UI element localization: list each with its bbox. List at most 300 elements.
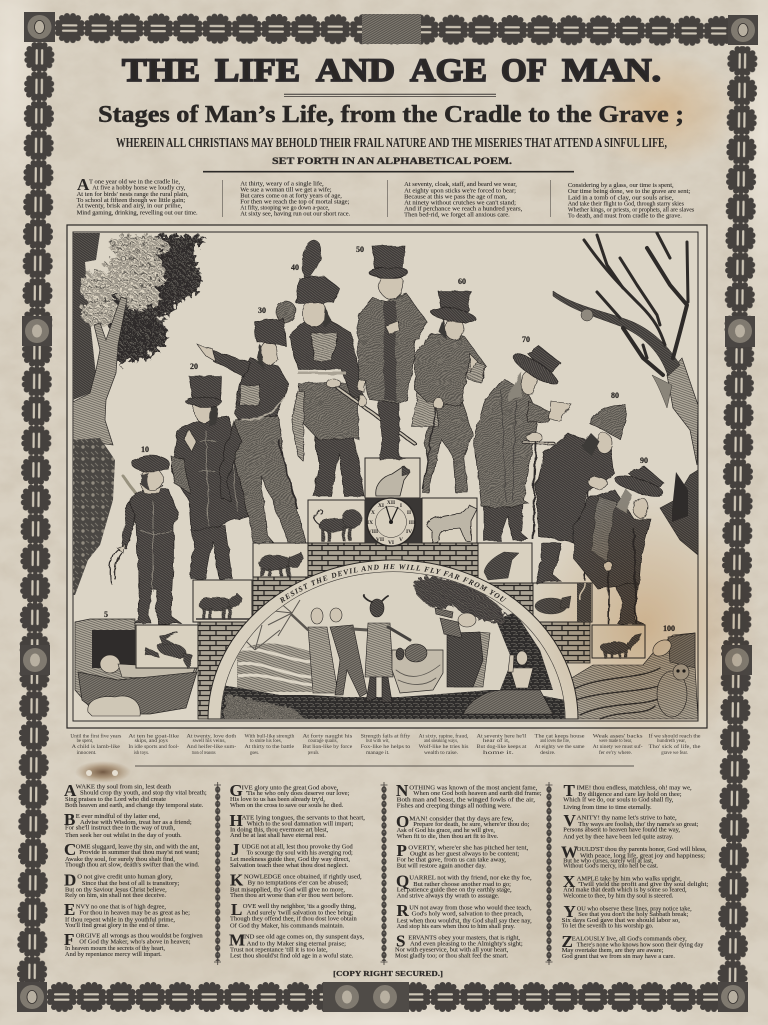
caption age 80: At eighty we the same — [535, 744, 585, 750]
clock: X — [371, 510, 375, 516]
poem column 2: At fifty, stooping we go down a-pace, — [240, 205, 330, 212]
dog box — [478, 543, 532, 583]
caption age 30: to smite his foes, — [250, 737, 282, 744]
caption age 10 — [128, 734, 180, 756]
title: OF — [501, 53, 547, 89]
stage 90: very old man — [573, 465, 665, 623]
engraving panel — [66, 224, 708, 729]
poem column T to Z: EALOUSLY live, all God's commands obey, — [572, 935, 687, 942]
poem column T to Z: OU who observe these lines, pray notice take, — [577, 905, 692, 912]
poem column T to Z: Persons absent to heaven have found the way, — [563, 827, 680, 834]
poem column T to Z: X — [563, 872, 576, 891]
poem column 2: We sue a woman till we get a wife; — [240, 186, 332, 193]
poem column N to S: And strive always thy wrath to assuage. — [397, 893, 500, 900]
caption age 60 — [419, 732, 468, 756]
poem column G to M: Salvation teach thee what thou dost neglect. — [230, 862, 349, 869]
dog box on top of the clock — [365, 458, 420, 498]
poem column N to S: And even pleasing to the Almighty's sight; — [410, 941, 523, 948]
poem column 4: Considering by a glass, our time is spent, — [568, 183, 674, 189]
donkey box — [592, 625, 645, 658]
poem column N to S: When fit to die, then thou art fit to live. — [397, 833, 499, 840]
poem column A to F: O not give credit unto human glory, — [77, 873, 173, 880]
poem column G to M: His love to us has been already try'd, — [230, 796, 325, 803]
caption age 5: Until the first five years — [70, 732, 121, 740]
poem column G to M: K — [230, 870, 244, 890]
poem column T to Z: There's none who knows how soon their dying day — [577, 941, 704, 948]
baby blanket — [118, 664, 195, 679]
poem column N to S: Fishes and creeping things all nothing were. — [397, 802, 512, 809]
poem column G to M: IVE glory unto the great God above, — [242, 784, 339, 791]
poem column N to S: When one God both heaven and earth did frame; — [413, 790, 542, 797]
poem column N to S: OVERTY, where'er she has pitched her tent, — [408, 845, 529, 852]
poem column T to Z: AMPLE take by him who walks upright, — [577, 875, 682, 882]
caption age 40: At forty naught his — [302, 732, 352, 740]
table cloth with treasure — [392, 644, 443, 693]
caption age 100: hundreth year, — [657, 738, 686, 744]
opening poem in four columns — [77, 175, 695, 220]
caption age 90: fer ev'ry where. — [599, 749, 632, 756]
stage 100: shrouded corpse and owl — [565, 633, 698, 719]
poem column G to M: To scourge thy soul with his avenging rod; — [247, 849, 353, 856]
poem column N to S: OTHING was known of the most ancient fame, — [409, 784, 538, 791]
poem column A to F: If thou repent while in thy youthful prime, — [65, 916, 175, 923]
caption age 50 — [361, 732, 411, 756]
poem column T to Z: OULD'ST thou thy parents honor, God will bless, — [577, 846, 707, 853]
bead column dividers — [214, 782, 552, 965]
poem column A to F: Since that the best of all is transitory; — [82, 880, 180, 887]
poem column A to F: For she'll instruct thee in the way of truth, — [65, 825, 175, 832]
poem column 1: At five a hobby horse we loudly cry, — [92, 184, 186, 191]
poem column G to M: But misapplied, thy God will give no more, — [230, 886, 345, 893]
caption age 40: courage quails, — [308, 738, 338, 744]
poem column T to Z — [561, 781, 708, 960]
caption age 100: grave we fear. — [661, 749, 688, 756]
poem column G to M: ATE lying tongues, the servants to that heart, — [242, 814, 365, 821]
poem column T to Z: See that you don't the holy Sabbath break; — [578, 911, 688, 918]
poem column G to M: UDGE not at all, lest thou provoke thy God — [242, 844, 353, 851]
poem column N to S: Lest when thou would'st, thy God shall say thee nay, — [397, 917, 532, 924]
goat box — [193, 580, 252, 622]
poem column T to Z: Welcome to thee, by him thy soul is steered. — [563, 892, 674, 899]
caption age 30: With bull-like strength — [244, 734, 295, 740]
poem column T to Z: And yet by thee have been led quite astray. — [563, 834, 674, 841]
poem column 2: But cares come on at forty years of age, — [240, 192, 342, 199]
background shade behind the tree — [73, 233, 100, 400]
poem column A to F: Awake thy soul, for surely thou shalt find, — [65, 856, 175, 863]
caption age 10: skips, and joys — [135, 738, 168, 744]
ox box — [253, 543, 308, 577]
temptress figure — [463, 651, 553, 714]
poem column 3: At eighty upon sticks we're forced to bear; — [404, 187, 516, 194]
devil figure — [364, 595, 410, 702]
poem column T to Z: IME! thou endless, matchless, oh! may we, — [577, 784, 692, 791]
clock — [365, 498, 422, 546]
poem column A to F: Should crop thy youth, and stop thy vital breath; — [80, 789, 207, 796]
poem column N to S: Q — [396, 872, 409, 890]
poem column N to S: N — [396, 781, 409, 800]
clock: V — [399, 537, 403, 543]
stage 50: mature man — [357, 245, 427, 458]
poem column G to M: Trust not repentance 'till it is too late, — [230, 946, 328, 953]
seated drunkard — [435, 608, 490, 687]
poem column N to S: For he that gave, from us can take away, — [397, 856, 506, 863]
woman figure — [292, 608, 338, 693]
poem column T to Z: By diligence and care lay hold on thee; — [578, 791, 682, 798]
left leafy tree — [73, 232, 203, 595]
border: centre block bottom — [323, 982, 409, 1012]
dark foliage behind temptress — [496, 612, 553, 690]
age numbers: 100 — [663, 624, 675, 633]
poem column N to S: S — [396, 932, 405, 950]
age numbers: 70 — [522, 335, 530, 344]
poem column A to F: And by repentance mercy will impart. — [65, 951, 162, 958]
caption age 30: At thirty to the battle — [244, 744, 295, 750]
poem column N to S: O — [396, 812, 409, 831]
poem column A to F: A — [64, 781, 77, 800]
caption age 5: A child is lamb-like — [72, 744, 121, 750]
poem column G to M: Then thou art worse than e'er thou wert before. — [230, 892, 354, 899]
caption age 20: swell his veins, — [193, 738, 226, 744]
stage 80: aged man — [535, 404, 625, 582]
caption age 80: desire. — [540, 750, 556, 756]
poem column T to Z: Y — [564, 902, 576, 921]
poem column N to S: R — [396, 901, 410, 920]
poem column A to F: Provide in summer that thou may'st not want; — [79, 849, 199, 856]
age numbers: 10 — [141, 445, 149, 454]
poem column G to M: NOWLEDGE once obtained, if rightly used, — [244, 874, 362, 881]
border: corner medallion top right — [728, 15, 758, 45]
poem column N to S: P — [396, 841, 407, 860]
poem column T to Z: God grant that we from sin may have a care. — [562, 953, 675, 960]
caption age 70 — [477, 734, 527, 756]
caption age 100: If we should reach the — [649, 732, 701, 740]
poem column G to M: And be at last shall have eternal rest. — [230, 832, 326, 839]
stage 70: old man — [473, 345, 570, 540]
caption age 20: mon of reasons — [192, 749, 216, 756]
captions under the engraving — [70, 732, 701, 756]
poem column T to Z: ANITY! thy name let's strive to hate, — [577, 814, 677, 821]
caption age 50: but with wit, — [366, 738, 390, 744]
caption age 70: home it. — [483, 750, 514, 756]
caption age 50: Fox-like he helps to — [361, 744, 411, 750]
clock: IX — [367, 520, 373, 526]
poem column G to M: IND see old age comes on, thy sunspent days, — [243, 934, 364, 941]
caption age 20 — [186, 734, 237, 756]
tree canopy — [410, 574, 503, 622]
border: bottom strip — [47, 982, 719, 1012]
scene inside arch — [221, 570, 565, 720]
poem column G to M: L — [231, 900, 242, 919]
poem column N to S: Prepare for death, be sure, where'er thou do; — [413, 821, 529, 828]
poem column 4: Laid in a tomb of clay, our souls arise, — [568, 194, 674, 201]
branches — [584, 233, 688, 375]
grass foreground left — [223, 694, 305, 719]
stage 60: older man — [410, 290, 485, 492]
poem column A to F: NVY no one that is of high degree, — [76, 904, 166, 911]
subtitle: Stages of Man’s Life, from the Cradle to the Grave ; — [98, 102, 684, 128]
poem column N to S: And stop his ears when thou to him shall pray. — [397, 923, 515, 930]
title: AGE — [410, 53, 487, 89]
owl — [657, 664, 689, 717]
caption age 70: But dog-like keeps at — [477, 744, 527, 750]
age numbers: 50 — [356, 245, 364, 254]
poem column 1 — [77, 175, 198, 216]
age numbers: 80 — [611, 391, 619, 400]
trunk — [667, 358, 698, 465]
poem column N to S: God's holy word, salvation to thee preach, — [412, 910, 524, 917]
poem column T to Z: V — [564, 811, 576, 830]
poem column T to Z: Without God's mercy, into hell be cast. — [563, 863, 659, 870]
poem column N to S: Let patience guide thee on thy earthly stage, — [397, 887, 512, 894]
clock: VI — [388, 540, 394, 546]
caption age 5: be spent, — [77, 738, 93, 744]
stage 20: young man — [170, 375, 247, 578]
poem column G to M: H — [230, 811, 243, 830]
poem column A to F: B — [64, 810, 75, 829]
caption age 70: hear of it, — [483, 737, 510, 744]
poem column G to M: J — [231, 840, 240, 859]
stage 40: officer — [288, 239, 413, 495]
age numbers: 90 — [640, 456, 648, 465]
poem column A to F: In heaven mourn the secrets of thy heart, — [65, 945, 165, 952]
poem column G to M: In doing this, thou evermore art blest, — [230, 826, 329, 833]
poem column 4: Whether kings, or priests, or prophets, all are slaves — [568, 208, 695, 214]
caption age 10: At ten he goat-like — [128, 734, 180, 740]
poem column N to S: Ought as her guest always to be content; — [410, 851, 519, 858]
caption age 50: manage it. — [366, 750, 390, 756]
ivy on trunk — [73, 438, 115, 595]
poem column G to M: 'Tis he who only does deserve our love; — [246, 790, 350, 797]
poem column T to Z: 'Twill yield the profit and give thy soul delight; — [578, 881, 708, 888]
poem column 2: At thirty, weary of a single life, — [240, 180, 324, 187]
arch band — [208, 560, 578, 719]
border: side medallion right lower — [722, 645, 752, 675]
caption age 90 — [593, 734, 643, 756]
poem column A to F: OME sluggard, leave thy sin, and with the ant, — [76, 843, 200, 850]
poem column N to S: Most gladly too; or thou shalt feel the smart. — [395, 953, 509, 960]
poem column G to M: And surely 'twill salvation to thee bring; — [247, 909, 354, 916]
age numbers — [104, 245, 675, 633]
poem column 2: At sixty see, having run out our short race. — [240, 212, 351, 218]
clock: I — [400, 503, 402, 509]
poem column A to F: Sing praises to the Lord who did create — [65, 796, 166, 803]
age numbers: 60 — [458, 277, 466, 286]
poem column 1: At ten for birds' nests range the rural plain, — [77, 191, 189, 198]
caption age 30: goes. — [250, 750, 259, 756]
poem column A to F: Both heaven and earth, and change thy temporal state. — [65, 802, 204, 809]
rule under title — [284, 94, 496, 96]
poem column A to F: But on thy Saviour Jesus Christ believe, — [65, 886, 167, 893]
poem column A to F: Advise with Wisdom, treat her as a friend; — [80, 819, 192, 826]
poem column N to S: But will restore again another day. — [397, 862, 486, 869]
poem column 3: Because at this we pass the age of man, — [404, 193, 507, 200]
arch with allegorical scene — [208, 560, 578, 720]
tree trunk — [73, 297, 127, 445]
clock: XI — [378, 503, 384, 509]
cat box and fire — [533, 583, 592, 622]
alphabetical poem — [64, 781, 708, 960]
caption age 10: In idle sports and fool- — [128, 743, 179, 750]
poem column G to M: M — [229, 930, 245, 950]
stains and ageing marks — [75, 495, 760, 783]
border: centre block top — [362, 14, 421, 44]
copyright line: [COPY RIGHT SECURED.] — [333, 969, 443, 978]
caption age 60: and sneaking ways, — [424, 738, 458, 744]
poem column 4: Our time being done, we to the grave are sent; — [568, 189, 691, 195]
border: corner medallion bottom left — [17, 982, 47, 1012]
age numbers: 5 — [104, 610, 108, 619]
dead tree on the right — [553, 233, 698, 555]
arch motto: RESIST THE DEVIL AND HE WILL FLY FAR FROM YOU — [280, 564, 506, 604]
young man figure — [330, 608, 368, 697]
poem column 1: At twenty, brisk and airy, in our prime, — [77, 204, 183, 210]
poem column N to S: MAN! consider that thy days are few, — [409, 815, 514, 822]
clock: III — [409, 520, 415, 526]
poem column T to Z: To let the seventh to his worship go. — [562, 923, 654, 930]
caption age 100: Tho' sick of life, the — [649, 743, 701, 750]
poem column T to Z: Living from time to time eternally. — [563, 804, 652, 811]
age numbers: 40 — [291, 263, 299, 272]
poem column A to F: For thou in heaven may be as great as he; — [79, 909, 190, 916]
clock: IV — [406, 529, 412, 535]
poem column T to Z: Which if we do, our souls to God shall fly, — [563, 797, 674, 804]
poem column T to Z: With peace, long life, great joy and happiness; — [580, 852, 705, 859]
poem column G to M: OVE well thy neighbor, 'tis a goodly thing, — [243, 903, 356, 910]
rule under headings — [203, 171, 574, 173]
poem column A to F: You'll find great glory in the end of time. — [65, 922, 170, 929]
age numbers: 30 — [258, 306, 266, 315]
poem column A to F: Then seek her out whilst in the day of youth. — [65, 832, 182, 839]
poem column G to M: And to thy Maker sing eternal praise; — [247, 940, 346, 947]
basket — [78, 672, 197, 714]
stage 30: soldier — [197, 300, 305, 542]
poem column 3: At seventy, cloak, staff, and beard we wear, — [404, 181, 517, 188]
caption age 90: were made to bear, — [599, 738, 632, 744]
border: top strip — [55, 13, 730, 46]
poem column G to M: Let meekness guide thee, God thy way direct, — [230, 856, 350, 863]
poem column T to Z: T — [564, 781, 576, 800]
poem column N to S — [395, 781, 542, 960]
lamb box — [422, 498, 477, 543]
poem column T to Z: Six days God gave that we should labor so, — [562, 917, 680, 924]
poem column G to M: G — [230, 781, 243, 800]
hare box — [136, 625, 198, 668]
title: AND — [316, 53, 395, 89]
border: corner medallion bottom right — [718, 982, 748, 1012]
caption age 100 — [649, 732, 701, 756]
border: side medallion left upper — [22, 316, 52, 346]
poem column A to F: Rely on him, sin shall not thee deceive. — [65, 892, 166, 899]
poem column A to F: ORGIVE all wrongs as thou wouldst be forgiven — [76, 933, 203, 940]
ground foliage — [221, 685, 565, 719]
poem column A to F: E — [64, 900, 75, 919]
poem column T to Z: W — [561, 842, 578, 862]
clock: VIII — [368, 529, 378, 535]
lamb under the cradle — [88, 696, 140, 716]
title — [122, 53, 661, 89]
poem column A to F: Though thou art slow, death's swifter than the wind. — [65, 862, 200, 869]
brick staircase — [198, 543, 590, 719]
stage 5: cradle — [75, 619, 197, 716]
border: left strip — [17, 42, 54, 982]
poem column 3: And if perchance we reach a hundred years, — [404, 206, 523, 213]
clock: II — [407, 510, 411, 516]
caption age 70: At seventy here he'll — [477, 734, 527, 740]
sunset sky bands — [236, 596, 312, 692]
poem column G to M: Though they offend thee, if thou dost love obtain — [230, 915, 357, 922]
title: MAN. — [562, 53, 661, 89]
title: THE — [122, 53, 200, 89]
caption age 5: innocent. — [77, 750, 96, 756]
caption age 40: prevails. — [308, 750, 319, 756]
caption age 20: At twenty, love doth — [186, 734, 237, 740]
poem column 3: At ninety without crutches we can't stand; — [404, 201, 516, 207]
border: corner medallion top left — [24, 12, 55, 42]
broken trunk and bat — [660, 470, 698, 555]
poem column T to Z: But he who curses, surely will at last, — [563, 858, 654, 865]
poem column G to M: Of God thy Maker, his commands maintain. — [230, 923, 345, 930]
caption age 5 — [70, 732, 121, 756]
caption age 10: ish toys. — [134, 750, 149, 756]
poem column N to S: Nor with eyeservice, but with all your heart, — [395, 947, 509, 954]
poem column N to S: UN not away from those who would thee teach, — [409, 904, 532, 911]
lion box — [308, 500, 365, 543]
border: right strip — [718, 46, 757, 983]
poem column N to S: ERVANTS obey your masters, that is right, — [408, 935, 520, 942]
poem column N to S: UARREL not with thy friend, nor eke thy foe, — [409, 875, 532, 882]
poem column T to Z: May overtake them, are they are aware; — [562, 947, 664, 954]
caption age 80 — [535, 734, 585, 756]
poem column 4 — [568, 183, 695, 220]
poem column G to M: Lest thou should'st find old age in a woful state. — [230, 952, 354, 959]
poem column 2 — [240, 180, 351, 218]
caption age 40: But lion-like by force — [302, 743, 353, 750]
caption age 30 — [244, 734, 295, 756]
poem column 1: To school at fifteen though we little gain; — [77, 197, 186, 204]
poem column G to M: When on the cross to save our souls he died. — [230, 802, 344, 809]
caption age 60: At sixty, rapine, fraud, — [419, 732, 468, 740]
poem column G to M: Which to the soul damnation will impart; — [247, 820, 354, 827]
poem column N to S: Ask of God his grace, and he will give, — [397, 827, 495, 834]
caption age 40 — [302, 732, 353, 756]
poem column A to F: F — [64, 930, 74, 949]
tagline second line: SET FORTH IN AN ALPHABETICAL POEM. — [272, 157, 512, 167]
poem column 4: To death, and must from cradle to the grave. — [568, 213, 682, 220]
caption age 60: Wolf-like he tries his — [419, 743, 468, 750]
poem column 3: Then bed-rid, we forget all anxious care. — [404, 212, 510, 219]
poem column 4: And take their flight to God, through starry skies — [568, 201, 685, 208]
main bough — [553, 291, 680, 376]
poem column 3 — [404, 181, 523, 219]
poem column 1: A — [77, 175, 90, 194]
rule under captions — [135, 765, 634, 767]
caption age 80: The cat keeps house — [535, 734, 585, 740]
title: LIFE — [215, 53, 300, 89]
caption age 90: At ninety we must suf- — [593, 743, 643, 750]
poem column T to Z: Z — [562, 932, 573, 951]
stage 10: boy — [109, 454, 180, 623]
border: side medallion left lower — [20, 645, 50, 675]
light foliage clusters — [77, 232, 166, 325]
caption age 90: Weak asses' backs — [593, 734, 643, 740]
poem column 1: T one year old we in the cradle lie, — [89, 180, 181, 186]
poem column G to M — [229, 781, 365, 959]
caption age 60: wealth to raise. — [424, 750, 458, 756]
poem column A to F: Of God thy Maker, who's above in heaven; — [79, 939, 191, 946]
age numbers: 20 — [190, 362, 198, 371]
poem column 1: Mind gaming, drinking, revelling out our time. — [77, 210, 198, 216]
poem column G to M: By no temptations e'er can be abused; — [248, 880, 349, 887]
